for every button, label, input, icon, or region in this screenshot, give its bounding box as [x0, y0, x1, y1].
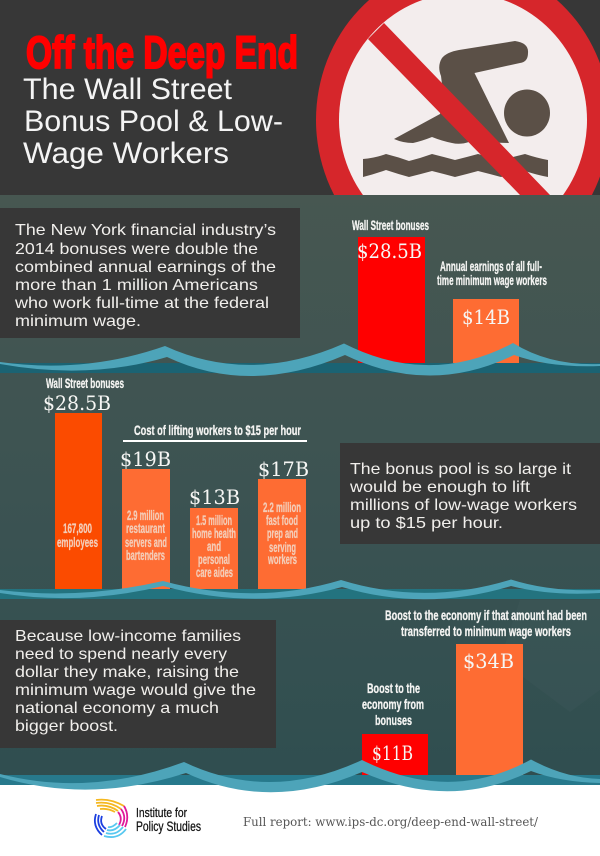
title: Off the Deep End: [26, 27, 298, 78]
panel: economy boost text: Because low-income families: [15, 628, 241, 645]
bar: home health aides: and: [207, 538, 221, 554]
panel: bonus pool text: would be enough to lift: [349, 479, 531, 496]
panel: economy boost text: need to spend nearly every: [15, 646, 227, 663]
bar chart: bonuses vs earnings: Wall Street bonuses: [352, 217, 429, 233]
bar chart: economic boost: bonuses: [375, 712, 412, 728]
panel: bonus pool text: millions of low-wage workers: [350, 497, 577, 514]
panel: doubled earnings text: minimum wage.: [15, 313, 141, 330]
source link: Full report: www.ips-dc.org/deep-end-wall-street/: [243, 815, 539, 829]
logo wordmark: Institute for: [136, 805, 188, 820]
bar: fast food workers: fast food: [266, 512, 298, 528]
panel: economy boost text: dollar they make, raising the: [15, 664, 239, 681]
panel: doubled earnings text: more than 1 million Americans: [15, 277, 258, 294]
bar: fast food workers: serving: [269, 539, 296, 555]
icon: no swimming sign: [316, 0, 600, 195]
panel: doubled earnings text: 2014 bonuses were double the: [15, 241, 258, 258]
title: Bonus Pool & Low-: [24, 105, 283, 138]
bar: restaurant workers: servers and: [125, 534, 167, 550]
panel: economy boost text: [0, 620, 276, 748]
bar: home health aides: home health: [192, 525, 236, 541]
bar: fast food workers: workers: [267, 551, 297, 567]
bar: Wall Street bonuses: $28.5B: [43, 391, 111, 415]
panel: bonus pool text: [340, 443, 600, 544]
page background: [0, 195, 600, 785]
panel: bonus pool text: up to $15 per hour.: [350, 515, 503, 532]
panel: economy boost text: bigger boost.: [15, 718, 118, 735]
bar chart: economic boost: $34B: [463, 649, 514, 673]
icon: Institute for Policy Studies logo: [95, 800, 127, 837]
bar: restaurant workers: bartenders: [126, 547, 165, 563]
bar: fast food workers: 2.2 million: [263, 499, 301, 515]
title: [23, 27, 298, 170]
bar: fast food workers: [258, 457, 309, 589]
bar: restaurant workers: 2.9 million: [127, 507, 164, 523]
panel: doubled earnings text: combined annual earnings of the: [15, 259, 276, 276]
bar: Wall Street bonuses: 167,800: [63, 520, 92, 536]
bar: Wall Street bonuses: employees: [57, 534, 98, 550]
bar: fast food workers: prep and: [267, 525, 298, 541]
bar: home health aides: $13B: [189, 485, 240, 509]
wave: third divider: [0, 760, 600, 792]
bar: home health aides: care aides: [196, 564, 233, 580]
panel: doubled earnings text: The New York financial industry’s: [15, 222, 276, 239]
bar chart: economic boost: economy from: [362, 696, 424, 712]
panel: economy boost text: minimum wage would give the: [15, 682, 256, 699]
wave: second divider: [0, 580, 600, 599]
header band: [0, 0, 600, 195]
logo wordmark: Policy Studies: [136, 818, 201, 834]
panel: economy boost text: national economy a much: [15, 700, 219, 717]
bar: home health aides: personal: [198, 551, 230, 567]
bar: restaurant workers: $19B: [120, 447, 171, 471]
bar: fast food workers: $17B: [258, 457, 309, 481]
footer band: [0, 760, 600, 856]
bar chart: bonuses vs earnings: $14B: [462, 305, 510, 329]
bar: Wall Street bonuses: [43, 375, 124, 589]
title: The Wall Street: [23, 73, 233, 106]
bar: restaurant workers: restaurant: [126, 520, 165, 536]
logo wordmark: [136, 805, 201, 834]
bar chart: bonuses vs earnings: [352, 217, 547, 363]
panel: bonus pool text: The bonus pool is so large it: [350, 461, 572, 478]
title: Wage Workers: [23, 137, 229, 170]
bar chart: cost of lifting workers to $15: [43, 375, 309, 589]
bar chart: economic boost: $11B: [372, 741, 413, 765]
chart heading: Cost of lifting workers to $15 per hour: [134, 422, 301, 438]
bar chart: bonuses vs earnings: $28.5B: [357, 239, 422, 263]
bar chart: economic boost: [362, 607, 587, 775]
bar: restaurant workers: [120, 447, 171, 589]
bar: home health aides: 1.5 million: [196, 512, 232, 528]
wave: first divider: [0, 343, 600, 376]
panel: doubled earnings text: who work full-time at the federal: [14, 295, 269, 312]
bar: Wall Street bonuses: Wall Street bonuses: [46, 375, 124, 391]
bar chart: economic boost: Boost to the: [367, 680, 420, 696]
bar: home health aides: [189, 485, 240, 589]
panel: doubled earnings text: [0, 208, 300, 338]
